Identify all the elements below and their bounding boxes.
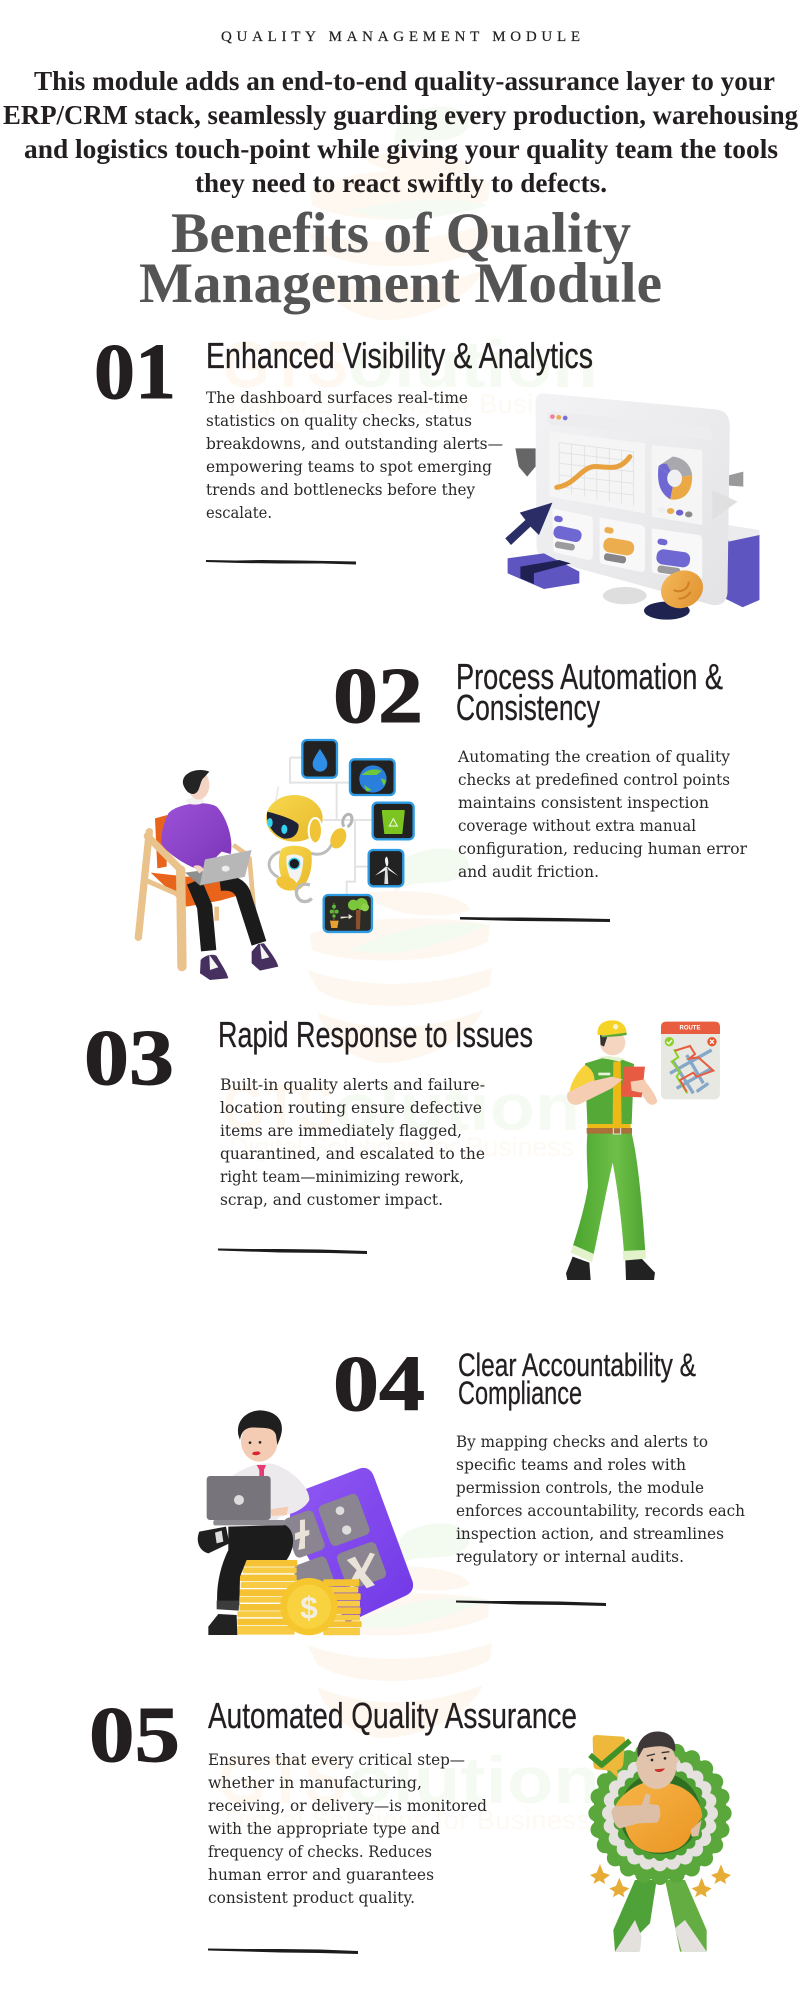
body 02: and audit friction. xyxy=(458,863,599,881)
number 04: 04 xyxy=(333,1341,425,1428)
module label: QUALITY MANAGEMENT MODULE xyxy=(221,29,580,45)
body 05: with the appropriate type and xyxy=(208,1820,440,1838)
body 02: maintains consistent inspection xyxy=(458,794,709,812)
section 04 xyxy=(333,1341,745,1606)
title 02: Process Automation & xyxy=(456,656,723,697)
number 02: 02 xyxy=(333,653,423,740)
body 01: statistics on quality checks, status xyxy=(206,412,472,430)
number 03: 03 xyxy=(84,1015,174,1102)
body 05: Ensures that every critical step— xyxy=(208,1751,465,1769)
body 01: empowering teams to spot emerging xyxy=(206,458,492,476)
title 05: Automated Quality Assurance xyxy=(208,1695,577,1736)
body 02: checks at predefined control points xyxy=(458,771,730,789)
body 04: By mapping checks and alerts to xyxy=(456,1433,708,1451)
body 02: coverage without extra manual xyxy=(458,817,696,835)
section 03 xyxy=(84,1014,533,1254)
watermark: lower logo and wordmark xyxy=(218,1523,600,1835)
watermark: middle logo and wordmark: olution xyxy=(334,1070,580,1144)
body 02 xyxy=(457,748,748,881)
body 01: The dashboard surfaces real-time xyxy=(206,389,468,407)
watermark: middle logo and wordmark xyxy=(222,848,580,1162)
watermark: middle logo and wordmark: GTS xyxy=(222,1070,334,1144)
section 02 xyxy=(333,653,748,922)
section 05 xyxy=(89,1692,577,1954)
illustration: man on coins with calculator: $ xyxy=(300,1590,318,1625)
watermark: top logo and wordmark: olution xyxy=(348,327,598,401)
title 02 xyxy=(456,656,723,728)
watermark: middle logo and wordmark: Digital Solutions for Business xyxy=(229,1132,574,1162)
body 04: specific teams and roles with xyxy=(456,1456,686,1474)
title 01: Enhanced Visibility & Analytics xyxy=(206,335,593,376)
body 05 xyxy=(208,1751,487,1907)
body 03 xyxy=(220,1076,485,1209)
intro paragraph: This module adds an end-to-end quality-assurance layer to your xyxy=(34,66,775,96)
body 05: human error and guarantees xyxy=(208,1866,434,1884)
illustration: worker with route card: ROUTE xyxy=(680,1026,700,1032)
body 04 xyxy=(456,1433,745,1566)
body 03: Built-in quality alerts and failure- xyxy=(220,1076,485,1094)
watermark: top logo and wordmark xyxy=(222,106,598,419)
main heading: Management Module xyxy=(139,252,662,315)
body 01: breakdowns, and outstanding alerts— xyxy=(206,435,503,453)
title 02: Consistency xyxy=(456,687,600,728)
body 05: receiving, or delivery—is monitored xyxy=(208,1797,487,1815)
watermark: lower logo and wordmark: GTS xyxy=(218,1743,346,1817)
watermark: top logo and wordmark: Digital Solutions for Business xyxy=(229,389,592,419)
watermark: lower logo and wordmark: Digital Solutions for Business xyxy=(225,1805,590,1835)
number 05: 05 xyxy=(89,1692,180,1779)
body 05: whether in manufacturing, xyxy=(208,1774,422,1792)
title 04: Clear Accountability & xyxy=(458,1347,696,1383)
body 02: configuration, reducing human error xyxy=(458,840,748,858)
title 04: Compliance xyxy=(458,1375,582,1411)
intro paragraph: they need to react swiftly to defects. xyxy=(195,168,607,198)
body 04: inspection action, and streamlines xyxy=(456,1525,724,1543)
illustration: rosette with thumbs-up man xyxy=(590,1732,731,1952)
intro paragraph xyxy=(3,66,798,198)
body 04: regulatory or internal audits. xyxy=(456,1548,684,1566)
illustration: analytics dashboard xyxy=(505,393,759,620)
watermark: top logo and wordmark: GTS xyxy=(222,327,348,401)
main heading xyxy=(139,202,662,315)
illustration: worker with route card xyxy=(566,1020,720,1280)
intro paragraph: ERP/CRM stack, seamlessly guarding every production, warehousing xyxy=(3,100,798,130)
body 05: frequency of checks. Reduces xyxy=(208,1843,432,1861)
intro paragraph: and logistics touch-point while giving your quality team the tools xyxy=(24,134,778,164)
illustration: man on coins with calculator xyxy=(198,1410,413,1635)
body 01 xyxy=(206,389,503,522)
section 01 xyxy=(94,329,593,564)
body 04: permission controls, the module xyxy=(456,1479,704,1497)
title 03: Rapid Response to Issues xyxy=(218,1014,533,1055)
number 01: 01 xyxy=(94,329,176,416)
title 04 xyxy=(458,1347,696,1411)
body 01: trends and bottlenecks before they xyxy=(206,481,475,499)
body 04: enforces accountability, records each xyxy=(456,1502,745,1520)
watermark: lower logo and wordmark: olution xyxy=(346,1743,600,1817)
body 02: Automating the creation of quality xyxy=(457,748,730,766)
body 03: items are immediately flagged, xyxy=(220,1122,462,1140)
body 03: location routing ensure defective xyxy=(220,1099,482,1117)
body 03: scrap, and customer impact. xyxy=(220,1191,443,1209)
body 01: escalate. xyxy=(206,504,272,522)
body 03: quarantined, and escalated to the xyxy=(220,1145,485,1163)
illustration: man with laptop and robot xyxy=(138,740,414,980)
body 03: right team—minimizing rework, xyxy=(220,1168,464,1186)
main heading: Benefits of Quality xyxy=(171,202,631,265)
body 05: consistent product quality. xyxy=(208,1889,415,1907)
